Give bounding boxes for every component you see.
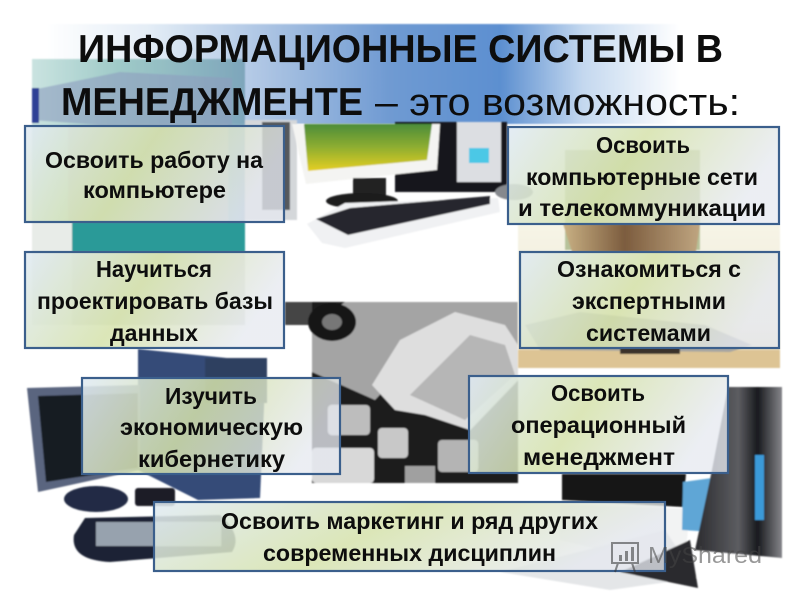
- panel: operations management: операционный: [511, 412, 686, 438]
- panel: study economic cybernetics: кибернетику: [138, 446, 285, 472]
- image: desktop computer, top centre: [292, 122, 533, 248]
- title band: [45, 24, 735, 124]
- panel: marketing and other disciplines: Освоить маркетинг и ряд других: [221, 508, 598, 534]
- panel: operations management: [469, 376, 728, 473]
- image: mouse on wooden desk, right: [518, 150, 780, 368]
- panel: expert systems: Ознакомиться с: [557, 256, 741, 282]
- panel: networks and telecommunications: и телекоммуникации: [518, 195, 766, 221]
- title: МЕНЕДЖМЕНТЕ: [61, 81, 363, 124]
- title: [61, 28, 740, 124]
- panel: master the computer: Освоить работу на: [45, 147, 263, 173]
- panel: study economic cybernetics: экономическую: [120, 414, 303, 440]
- panel: expert systems: системами: [586, 320, 711, 346]
- panel: operations management: менеджмент: [523, 444, 675, 470]
- watermark: MyShared: [612, 542, 762, 572]
- panel: design databases: данных: [110, 320, 198, 346]
- panel: expert systems: экспертными: [572, 288, 726, 314]
- image: black and white mouse on keyboard, centre: [285, 302, 518, 483]
- panel: design databases: [25, 252, 284, 348]
- panel: networks and telecommunications: Освоить: [596, 132, 690, 158]
- panel: networks and telecommunications: компьютерные сети: [526, 164, 758, 190]
- panel: operations management: Освоить: [551, 380, 645, 406]
- panel: master the computer: [25, 126, 284, 222]
- panel: expert systems: [520, 252, 779, 348]
- panel: marketing and other disciplines: [154, 502, 665, 571]
- image: blue desktop computer, bottom left: [27, 349, 267, 562]
- panel: networks and telecommunications: [508, 127, 779, 224]
- title: – это возможность:: [375, 82, 740, 124]
- panel: design databases: Научиться: [96, 256, 212, 282]
- title: ИНФОРМАЦИОННЫЕ СИСТЕМЫ В: [78, 28, 723, 71]
- image: photos, keyboard and tower, bottom right: [500, 387, 782, 590]
- panel: study economic cybernetics: [82, 378, 340, 474]
- panel: study economic cybernetics: Изучить: [165, 383, 257, 409]
- image: blurred monitor, top left: [32, 59, 297, 325]
- panel: marketing and other disciplines: современных дисциплин: [263, 540, 556, 566]
- panel: master the computer: компьютере: [83, 177, 226, 203]
- panel: design databases: проектировать базы: [37, 288, 273, 314]
- watermark: MyShared: MyShared: [648, 542, 762, 568]
